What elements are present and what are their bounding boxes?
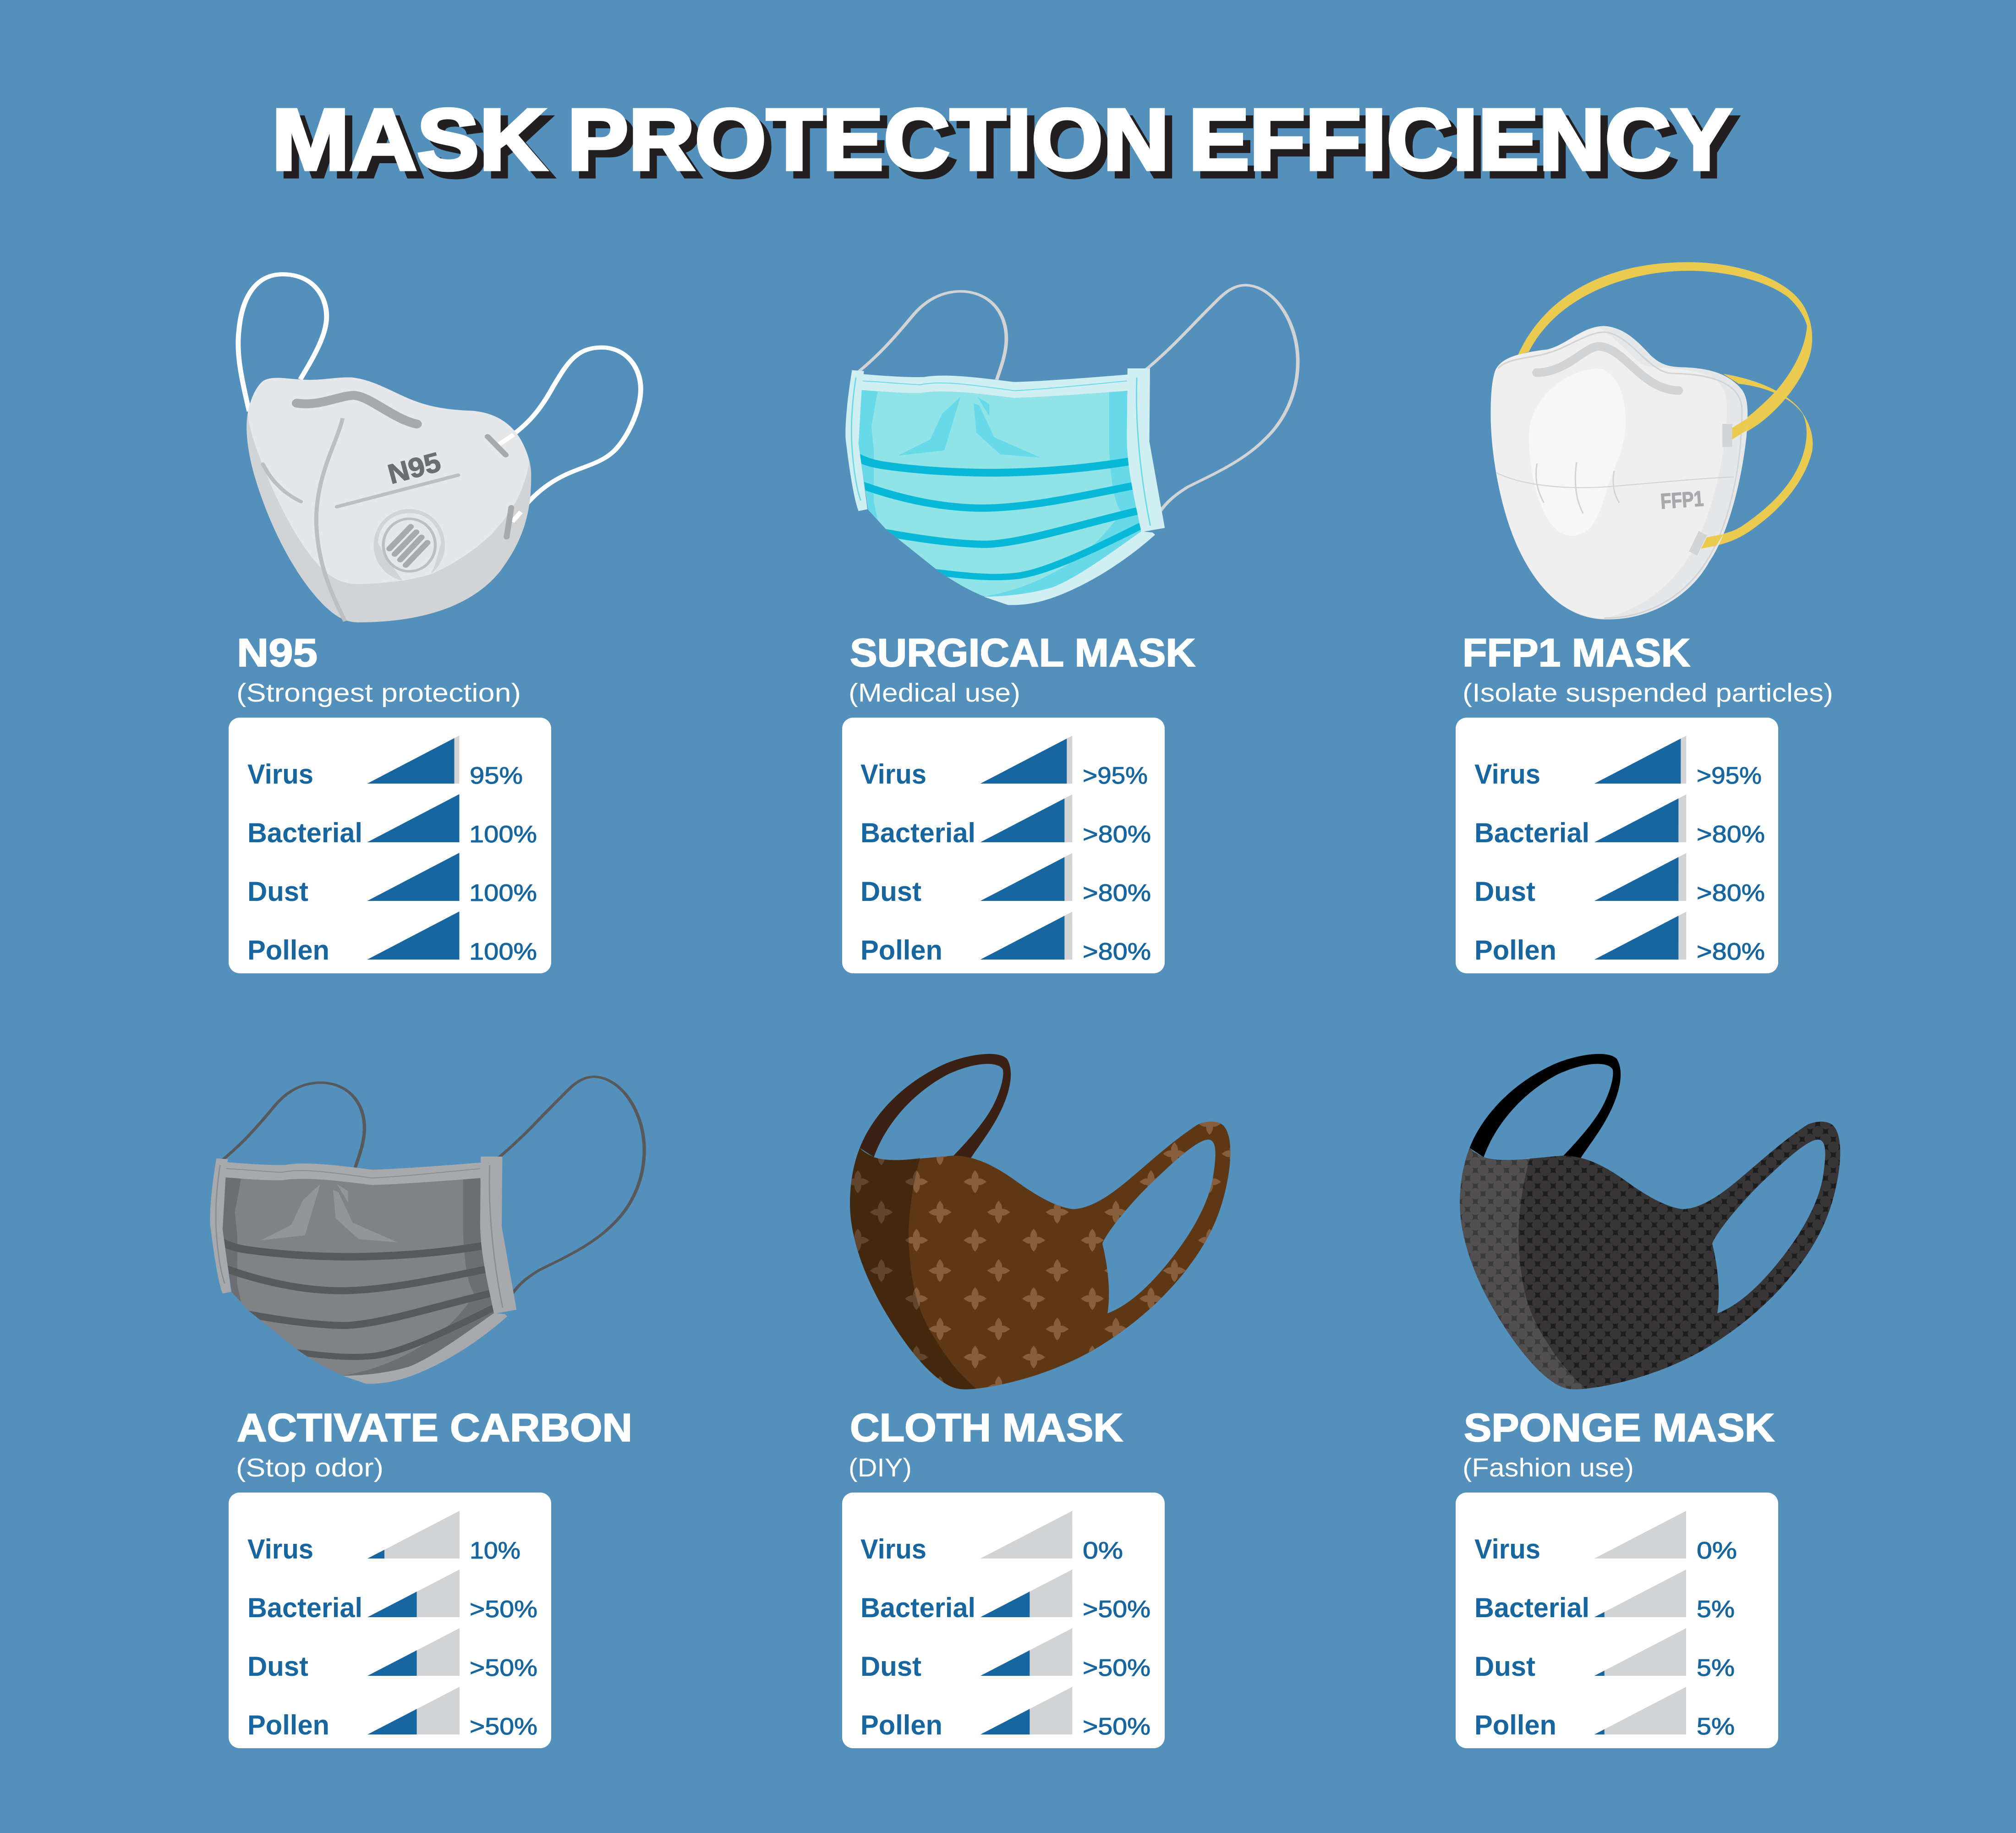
- row: Virus >95%: Virus: [860, 759, 926, 790]
- illustration: FFP1 mask: FFP1: [1660, 486, 1704, 513]
- row: Bacterial 5%: Bacterial: [1474, 1592, 1589, 1623]
- row: Virus 0%: Virus: [1474, 1534, 1540, 1564]
- illustration: N95 mask: [238, 274, 641, 622]
- illustration: activated carbon mask: [210, 1077, 644, 1384]
- title: PROTECTION: [575, 99, 1177, 196]
- row: Virus >95%: [1474, 736, 1762, 790]
- row: Dust 100%: Dust: [247, 876, 308, 907]
- illustration: cloth mask: [850, 1054, 1230, 1389]
- title: MASK: [272, 91, 547, 188]
- title: [272, 91, 1739, 196]
- row: Dust >50%: [860, 1628, 1150, 1682]
- row: Bacterial >80%: [1474, 795, 1765, 848]
- row: Dust 5%: [1474, 1628, 1735, 1682]
- row: Bacterial >50%: >50%: [1083, 1596, 1150, 1623]
- heading: N95: N95: [237, 631, 318, 675]
- row: Bacterial 100%: Bacterial: [247, 818, 362, 848]
- row: Dust >50%: Dust: [247, 1651, 308, 1682]
- row: Pollen >80%: Pollen: [860, 935, 942, 966]
- row: Bacterial 5%: [1474, 1570, 1735, 1623]
- panel: FFP1 mask efficiency: [1456, 718, 1778, 973]
- row: Bacterial >80%: Bacterial: [1474, 818, 1589, 848]
- row: Pollen >50%: >50%: [1083, 1713, 1150, 1740]
- row: Dust >80%: Dust: [860, 876, 921, 907]
- row: Pollen >80%: >80%: [1697, 938, 1765, 965]
- row: Virus 0%: [1474, 1511, 1737, 1564]
- row: Bacterial 100%: 100%: [469, 821, 537, 848]
- row: Virus >95%: [860, 736, 1148, 790]
- row: Pollen 5%: [1474, 1687, 1735, 1740]
- row: Pollen 100%: 100%: [469, 938, 537, 965]
- heading: surgical mask: SURGICAL MASK: [850, 631, 1195, 675]
- illustration: sponge mask: [1460, 1054, 1840, 1389]
- panel: sponge mask efficiency: [1456, 1493, 1778, 1748]
- row: Dust 5%: 5%: [1697, 1655, 1735, 1681]
- row: Virus 0%: [860, 1511, 1123, 1564]
- row: Dust 100%: [247, 853, 537, 907]
- row: Dust 5%: Dust: [1474, 1651, 1535, 1682]
- row: Dust >50%: Dust: [860, 1651, 921, 1682]
- row: Pollen >80%: [860, 912, 1151, 966]
- row: Dust >80%: >80%: [1697, 880, 1765, 906]
- heading: FFP1 mask: FFP1 MASK: [1463, 631, 1690, 675]
- row: Virus 10%: 10%: [470, 1537, 520, 1564]
- row: Dust >50%: >50%: [470, 1655, 537, 1681]
- illustration: surgical mask: [845, 285, 1298, 605]
- subheading: FFP1 mask: (Isolate suspended particles): [1463, 678, 1833, 708]
- heading: cloth mask: CLOTH MASK: [850, 1406, 1123, 1450]
- row: Dust >80%: Dust: [1474, 876, 1535, 907]
- row: Virus >95%: >95%: [1697, 763, 1762, 789]
- row: Pollen >50%: Pollen: [247, 1710, 329, 1740]
- row: Virus 10%: Virus: [247, 1534, 313, 1564]
- illustration: N95 mask: N95: [384, 446, 444, 490]
- subheading: cloth mask: (DIY): [849, 1453, 912, 1482]
- row: Bacterial >50%: >50%: [470, 1596, 537, 1623]
- row: Pollen 5%: Pollen: [1474, 1710, 1556, 1740]
- panel: activate carbon efficiency: [229, 1493, 551, 1748]
- title: EFFICIENCY: [1196, 99, 1739, 196]
- row: Virus >95%: Virus: [1474, 759, 1540, 790]
- row: Pollen >80%: Pollen: [1474, 935, 1556, 966]
- row: Bacterial >50%: Bacterial: [247, 1592, 362, 1623]
- illustration: FFP1 mask: [1491, 262, 1813, 620]
- row: Virus >95%: >95%: [1083, 763, 1148, 789]
- row: Dust 100%: 100%: [469, 880, 537, 906]
- panel: N95 efficiency: [229, 718, 551, 973]
- row: Dust >50%: [247, 1628, 537, 1682]
- title: PROTECTION: [567, 91, 1169, 188]
- heading: sponge mask: SPONGE MASK: [1464, 1406, 1775, 1450]
- row: Pollen >50%: [247, 1687, 537, 1740]
- row: Pollen >50%: Pollen: [860, 1710, 942, 1740]
- row: Dust >80%: [860, 853, 1151, 907]
- subheading: N95: (Strongest protection): [236, 678, 521, 708]
- subheading: activate carbon: (Stop odor): [236, 1453, 383, 1482]
- row: Dust >80%: [1474, 853, 1765, 907]
- title: EFFICIENCY: [1189, 91, 1732, 188]
- row: Dust >80%: >80%: [1083, 880, 1151, 906]
- row: Bacterial 100%: [247, 794, 537, 848]
- row: Virus 0%: Virus: [860, 1534, 926, 1564]
- row: Pollen >80%: [1474, 912, 1765, 966]
- title: MASK: [279, 99, 554, 196]
- row: Bacterial >50%: [860, 1570, 1150, 1623]
- row: Pollen 5%: 5%: [1697, 1713, 1735, 1740]
- panel: cloth mask efficiency: [842, 1493, 1165, 1748]
- row: Pollen 100%: Pollen: [247, 935, 329, 966]
- subheading: sponge mask: (Fashion use): [1463, 1453, 1634, 1482]
- row: Bacterial >80%: [860, 795, 1151, 848]
- row: Virus 95%: [247, 735, 523, 790]
- row: Virus 95%: Virus: [247, 759, 313, 790]
- row: Bacterial 5%: 5%: [1697, 1596, 1735, 1623]
- row: Bacterial >50%: Bacterial: [860, 1592, 975, 1623]
- row: Virus 10%: [247, 1511, 520, 1564]
- row: Virus 0%: 0%: [1697, 1537, 1737, 1564]
- row: Bacterial >80%: >80%: [1697, 821, 1765, 848]
- subheading: surgical mask: (Medical use): [849, 678, 1020, 708]
- panel: surgical mask efficiency: [842, 718, 1165, 973]
- row: Pollen >50%: [860, 1687, 1150, 1740]
- row: Bacterial >80%: Bacterial: [860, 818, 975, 848]
- row: Pollen 100%: [247, 911, 537, 966]
- row: Virus 95%: 95%: [470, 763, 523, 789]
- heading: activate carbon: ACTIVATE CARBON: [237, 1406, 632, 1450]
- row: Virus 0%: 0%: [1083, 1537, 1123, 1564]
- row: Pollen >80%: >80%: [1083, 938, 1151, 965]
- row: Bacterial >80%: >80%: [1083, 821, 1151, 848]
- row: Bacterial >50%: [247, 1570, 537, 1623]
- row: Pollen >50%: >50%: [470, 1713, 537, 1740]
- row: Dust >50%: >50%: [1083, 1655, 1150, 1681]
